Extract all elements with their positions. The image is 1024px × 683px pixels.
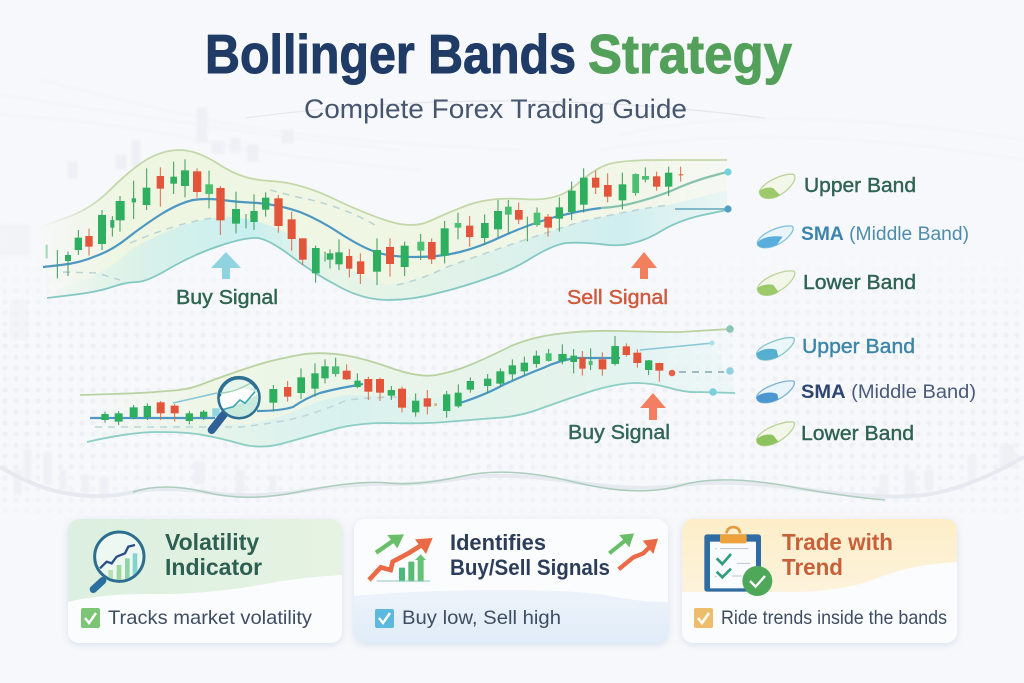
card: volatility indicator bbox=[68, 519, 342, 643]
label: lower buy signal: Buy Signal bbox=[568, 422, 670, 444]
card header band bbox=[68, 519, 342, 602]
SMA line bbox=[90, 358, 620, 418]
legend item: SMA: SMA (Middle Band) bbox=[801, 382, 976, 403]
legend item: upper band: Upper Band bbox=[802, 336, 915, 358]
upper band line bbox=[40, 150, 727, 227]
icon: clipboard bbox=[704, 527, 772, 596]
legend item: upper band: Upper Band bbox=[804, 175, 916, 197]
legend item: lower band: Lower Band bbox=[801, 423, 914, 445]
arrow: sell signal bbox=[631, 252, 657, 279]
legend item: lower band bbox=[757, 422, 914, 446]
icon: arrows right bbox=[609, 533, 658, 569]
card text: Tracks market volatility bbox=[108, 607, 312, 629]
legend item: lower band bbox=[757, 271, 916, 295]
legend item: lower band: Lower Band bbox=[803, 272, 916, 294]
upper band line bbox=[80, 329, 730, 395]
card text: Buy low, Sell high bbox=[402, 607, 561, 629]
title: Strategy bbox=[588, 23, 792, 85]
card lower band bbox=[354, 590, 668, 643]
legend item: SMA: SMA (Middle Band) bbox=[801, 224, 969, 245]
arrow: buy signal bbox=[211, 252, 241, 279]
legend item: upper band bbox=[757, 336, 915, 360]
subtitle: Complete Forex Trading Guide bbox=[304, 94, 687, 124]
legend item: SMA bbox=[757, 224, 969, 248]
legend: upper chart bbox=[757, 174, 969, 295]
chart: upper candlestick with Bollinger Bands bbox=[40, 150, 732, 309]
band fill bbox=[80, 329, 735, 447]
candles left part bbox=[46, 159, 381, 285]
chart: lower candlestick with Bollinger Bands bbox=[80, 325, 735, 447]
dashed band centre bbox=[63, 190, 670, 285]
card: volatility indicator: Indicator bbox=[165, 554, 262, 580]
lower band line bbox=[87, 383, 735, 447]
heading: Trade with bbox=[782, 529, 893, 555]
legend item: upper band bbox=[759, 174, 916, 198]
checkbox bbox=[694, 608, 713, 628]
checkbox bbox=[375, 609, 394, 628]
SMA line bbox=[43, 199, 601, 267]
heading: Volatility bbox=[165, 529, 259, 555]
lower band line bbox=[47, 210, 727, 300]
icon: arrows and bars bbox=[369, 534, 433, 582]
card: trade with trend: Trend bbox=[782, 554, 843, 580]
icon: magnifier on chart bbox=[212, 378, 260, 430]
arrow: lower signal bbox=[640, 393, 666, 420]
candles right part bbox=[386, 167, 683, 277]
card: buy and sell signals bbox=[354, 519, 668, 643]
card: trade with trend bbox=[682, 519, 957, 643]
title: Bollinger Bands bbox=[205, 23, 576, 85]
legend: lower chart bbox=[757, 336, 976, 446]
candles right part bbox=[424, 336, 663, 418]
band fill bbox=[40, 150, 727, 300]
card text: Ride trends inside the bands bbox=[721, 607, 947, 629]
label: buy signal: Buy Signal bbox=[176, 287, 278, 309]
label: sell signal: Sell Signal bbox=[567, 287, 668, 309]
checkbox bbox=[81, 608, 100, 628]
icon: magnifier with chart bbox=[93, 532, 144, 589]
heading: Identifies bbox=[450, 530, 546, 555]
candles left part bbox=[101, 358, 419, 425]
card: buy and sell signals: Buy/Sell Signals bbox=[450, 555, 610, 580]
dashed band centre bbox=[95, 397, 400, 427]
card header band bbox=[682, 519, 957, 592]
